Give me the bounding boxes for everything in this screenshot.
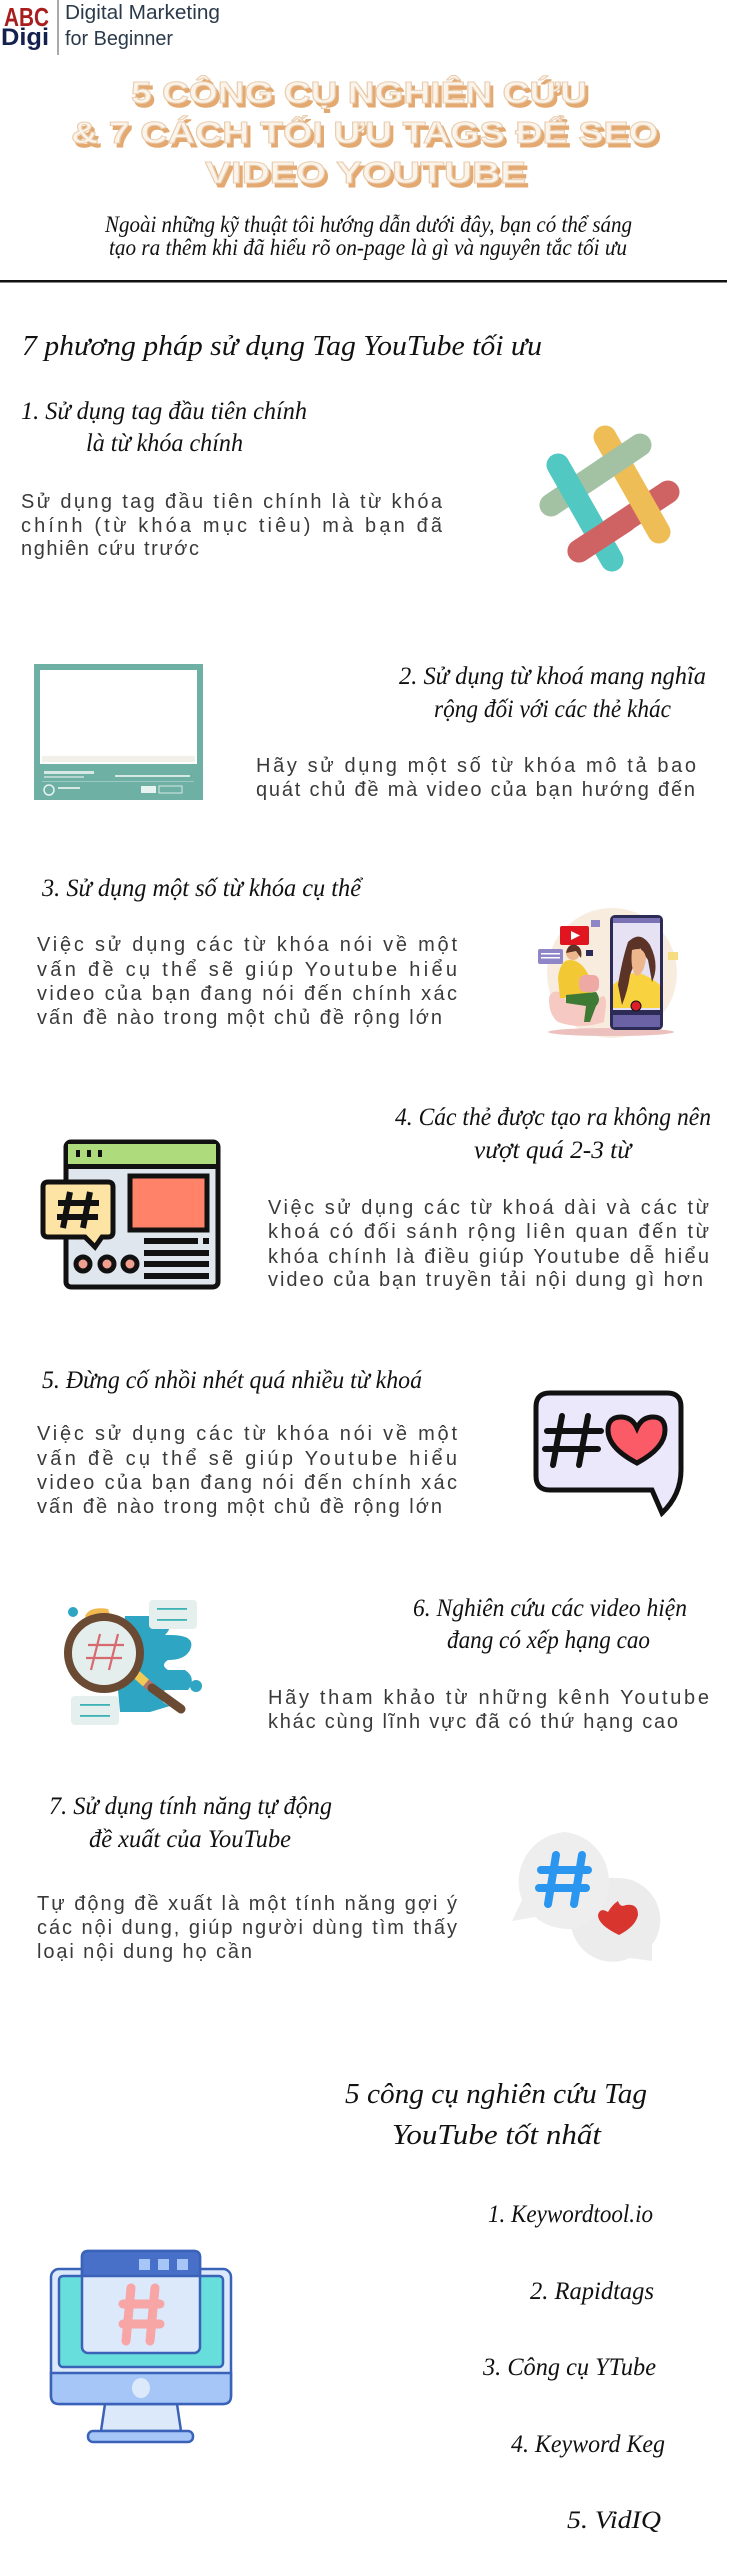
text: method 2: Hãy sử dụng một số từ khóa mô tả bao <box>256 755 696 777</box>
icon: woman filming with phone <box>538 908 678 1038</box>
list: tools: 5. VidIQ <box>567 2507 661 2534</box>
heading: method 6 <box>413 1595 687 1654</box>
heading: 5 tools: 5 công cụ nghiên cứu Tag <box>345 2078 647 2110</box>
list: tools: 2. Rapidtags <box>530 2278 654 2305</box>
heading: method 7: 7. Sử dụng tính năng tự động <box>49 1793 332 1820</box>
panel: method 4 <box>43 1104 711 1291</box>
text: method 1: chính (từ khóa mục tiêu) mà bạn đã <box>21 515 443 537</box>
panel: method 1 <box>21 398 668 560</box>
icon: video player <box>34 664 203 800</box>
heading: method 2: 2. Sử dụng từ khoá mang nghĩa <box>399 663 706 690</box>
icon: hash and heart chat bubbles <box>512 1832 660 1962</box>
logo: ABC Digi: for Beginner <box>65 28 173 50</box>
subtitle text: Ngoài những kỹ thuật tôi hướng dẫn dưới đây, bạn có thể sáng <box>104 212 632 237</box>
title: & 7 CÁCH TỐI ƯU TAGS ĐỂ SEO <box>71 114 658 150</box>
heading: method 2 <box>399 663 706 723</box>
panel: method 5 <box>37 1367 681 1518</box>
text: method 7: loại nội dung họ cần <box>37 1941 252 1963</box>
text: method 1 <box>21 491 443 560</box>
icon: magnifying glass with hash <box>68 1600 202 1725</box>
panel: method 3 <box>37 875 678 1038</box>
heading: 5 tools <box>345 2078 647 2151</box>
text: method 1: Sử dụng tag đầu tiên chính là từ khóa <box>21 491 443 513</box>
title: VIDEO YOUTUBE <box>205 155 526 190</box>
text: method 3 <box>37 934 457 1029</box>
panel: method 2 <box>34 663 706 801</box>
text: method 4: video của bạn truyền tải nội dung gì hơn <box>268 1269 703 1291</box>
text: method 4: khóa chính là điều giúp Youtube dễ hiểu <box>268 1245 709 1268</box>
list: tools: 3. Công cụ YTube <box>482 2354 656 2381</box>
heading: method 6: 6. Nghiên cứu các video hiện <box>413 1595 687 1622</box>
text: method 7: các nội dung, giúp người dùng tìm thấy <box>37 1917 457 1939</box>
logo: ABC Digi: ABC <box>4 2 49 32</box>
heading: method 1: là từ khóa chính <box>86 430 243 457</box>
text: method 4: Việc sử dụng các từ khoá dài và các từ <box>268 1197 709 1219</box>
text: method 5: vấn đề nào trong một chủ đề rộng lớn <box>37 1496 442 1518</box>
logo: ABC Digi: Digital Marketing <box>65 2 220 24</box>
text: method 7: Tự động đề xuất là một tính năng gợi ý <box>37 1893 457 1915</box>
panel: method 7 <box>37 1793 660 1963</box>
text: method 6: Hãy tham khảo từ những kênh Youtube <box>268 1687 709 1709</box>
text: method 1: nghiên cứu trước <box>21 538 199 560</box>
heading: method 7 <box>49 1793 332 1853</box>
heading: method 4: 4. Các thẻ được tạo ra không nên <box>395 1104 711 1131</box>
list: tools <box>482 2201 665 2534</box>
heading: method 4 <box>395 1104 711 1164</box>
text: method 6: khác cùng lĩnh vực đã có thứ hạng cao <box>268 1711 678 1733</box>
title <box>71 74 658 190</box>
text: method 6 <box>268 1687 709 1733</box>
text: method 5: vấn đề cụ thể sẽ giúp Youtube hiểu <box>37 1448 457 1470</box>
text: method 4: khoá có đối sánh rộng liên quan đến từ <box>268 1221 709 1243</box>
text: method 3: vấn đề cụ thể sẽ giúp Youtube hiểu <box>37 959 457 981</box>
icon: colourful hash sticks <box>551 437 668 560</box>
logo: ABC Digi: Digi <box>1 24 49 51</box>
text: method 3: vấn đề nào trong một chủ đề rộng lớn <box>37 1007 442 1029</box>
text: method 7 <box>37 1893 457 1963</box>
icon: speech bubble with hash and heart <box>536 1393 681 1513</box>
list: tools: 4. Keyword Keg <box>511 2431 665 2458</box>
heading: method 7: đề xuất của YouTube <box>89 1826 291 1853</box>
text: method 3: Việc sử dụng các từ khóa nói về một <box>37 934 457 956</box>
title: 5 CÔNG CỤ NGHIÊN CỨU <box>131 74 587 110</box>
heading: 5 tools: YouTube tốt nhất <box>392 2119 602 2151</box>
text: method 2: quát chủ đề mà video của bạn hướng đến <box>256 779 695 801</box>
subtitle text: tạo ra thêm khi đã hiểu rõ on-page là gì và nguyên tắc tối ưu <box>109 235 627 260</box>
subtitle text <box>104 212 632 260</box>
text: method 2 <box>256 755 696 801</box>
heading: method 5: 5. Đừng cố nhồi nhét quá nhiều từ khoá <box>42 1367 422 1394</box>
heading: method 1 <box>21 398 307 457</box>
text: method 5: video của bạn đang nói đến chính xác <box>37 1472 457 1494</box>
heading: method 4: vượt quá 2-3 từ <box>474 1137 633 1164</box>
list: tools: 1. Keywordtool.io <box>488 2201 653 2228</box>
heading: method 2: rộng đối với các thẻ khác <box>434 696 671 723</box>
logo: ABC Digi <box>1 0 220 55</box>
panel: method 6 <box>68 1595 709 1733</box>
text: method 3: video của bạn đang nói đến chính xác <box>37 983 457 1005</box>
heading: 7 methods: 7 phương pháp sử dụng Tag YouTube tối ưu <box>22 330 542 362</box>
icon: desktop monitor with hash window <box>51 2251 231 2442</box>
heading: method 1: 1. Sử dụng tag đầu tiên chính <box>21 398 307 425</box>
text: method 5: Việc sử dụng các từ khóa nói về một <box>37 1423 457 1445</box>
heading: method 3: 3. Sử dụng một số từ khóa cụ thể <box>41 875 364 902</box>
text: method 5 <box>37 1423 457 1518</box>
panel: 5 tools <box>51 2078 665 2534</box>
heading: method 6: đang có xếp hạng cao <box>447 1627 650 1654</box>
text: method 4 <box>268 1197 709 1291</box>
icon: browser window with hash bubble <box>43 1142 218 1287</box>
